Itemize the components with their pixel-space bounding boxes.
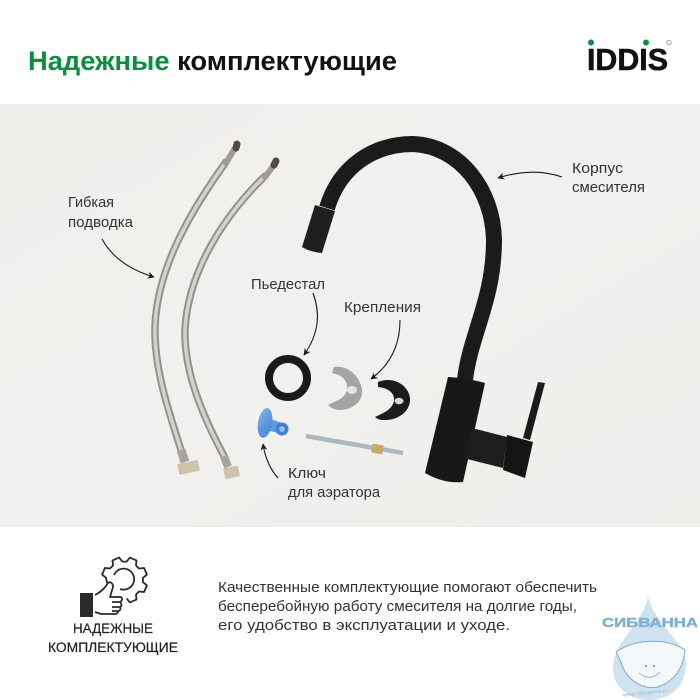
hose 2 (185, 161, 276, 479)
gear outline (102, 558, 147, 602)
mounting stud (306, 436, 403, 453)
label: faucet body: Корпус (572, 161, 623, 177)
faucet body (425, 377, 485, 482)
description text: Качественные комплектующие помогают обеспечить (218, 580, 597, 596)
logo: IDDIS: IDDIS (587, 42, 668, 77)
arrow: faucet body (498, 172, 562, 178)
thumb hand (95, 582, 122, 614)
label: flexible hose: Гибкая (68, 195, 114, 211)
label: flexible hose: подводка (68, 215, 134, 231)
cuff (80, 593, 93, 617)
arrow: flexible hose (102, 239, 154, 277)
blue aerator key (256, 407, 288, 439)
faucet (302, 144, 545, 482)
faucet arm (463, 428, 507, 468)
arrow: fasteners (371, 320, 400, 379)
watermark bathtub (616, 641, 685, 688)
flexible hoses (155, 144, 276, 479)
description text: его удобство в эксплуатации и уходе. (218, 618, 510, 634)
watermark drop (613, 597, 686, 700)
black mounting plate (375, 380, 410, 420)
faucet aerator tip (302, 205, 335, 253)
watermark: Sibvanna (602, 597, 699, 700)
watermark url: www.sibvanna.ru (622, 688, 668, 699)
icon caption: НАДЕЖНЫЕ (73, 620, 153, 636)
gear inner arc (114, 569, 134, 590)
label: faucet body: смесителя (572, 180, 645, 196)
icon caption: КОМПЛЕКТУЮЩИЕ (48, 639, 178, 655)
arrow: pedestal (304, 293, 317, 355)
faucet knob (503, 435, 533, 478)
watermark name: СИБВАННА (602, 615, 699, 630)
label: aerator key: для аэратора (288, 485, 381, 501)
grey mounting plate (328, 367, 362, 410)
description text: бесперебойную работу смесителя на долгие годы, (218, 599, 577, 615)
watermark face (639, 665, 660, 677)
label: pedestal: Пьедестал (251, 277, 325, 293)
arrow: aerator key (263, 444, 278, 478)
label: fasteners: Крепления (344, 300, 421, 316)
hose 1 (155, 144, 237, 475)
icon: thumbs up with gear (80, 558, 147, 617)
pedestal ring (269, 359, 307, 397)
panel: product photo (0, 104, 700, 527)
label: aerator key: Ключ (288, 466, 326, 482)
title: Надежные комплектующие (28, 46, 397, 76)
faucet spout hose (327, 144, 494, 380)
faucet lever (523, 382, 545, 440)
